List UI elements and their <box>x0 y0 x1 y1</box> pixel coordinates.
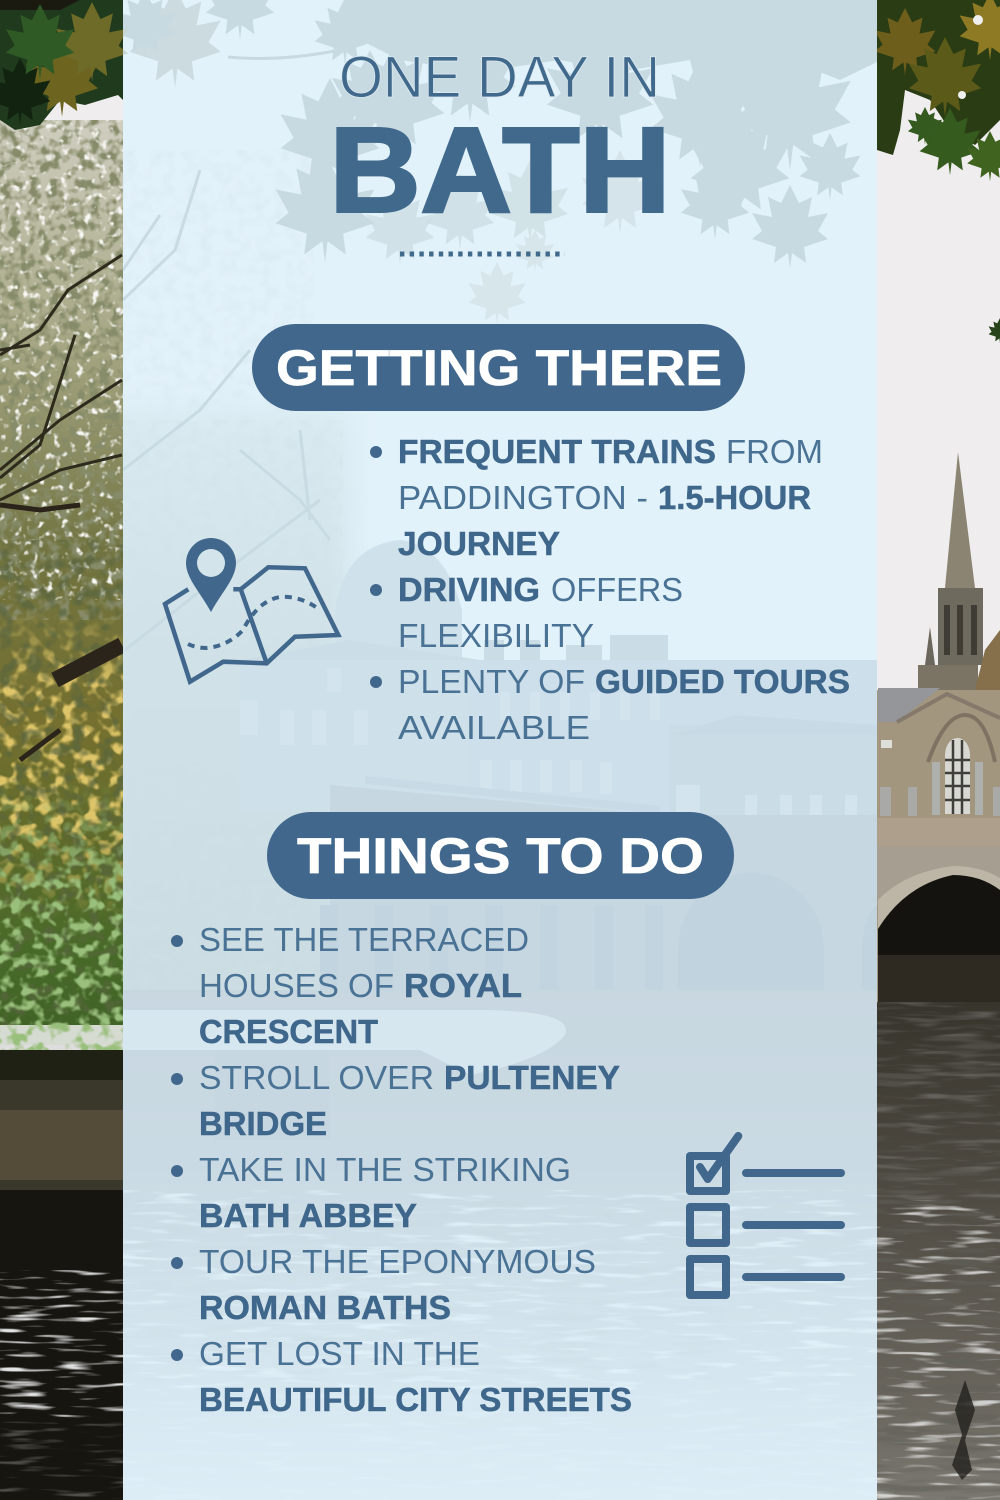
item: trains: 1.5-HOUR <box>658 479 811 516</box>
item: driving: OFFERS <box>551 571 683 608</box>
item: city streets: BEAUTIFUL CITY STREETS <box>199 1381 632 1418</box>
bullet list: getting there <box>370 433 850 746</box>
section: things to do <box>171 812 841 1418</box>
item: driving: DRIVING <box>398 571 540 608</box>
overhanging leaves behind the panel <box>115 0 877 325</box>
item: trains: FROM <box>726 433 823 470</box>
item: royal crescent: SEE THE TERRACED <box>199 921 529 958</box>
item: royal crescent: HOUSES OF <box>199 967 394 1004</box>
item: pulteney bridge <box>171 1059 620 1142</box>
left trees <box>0 120 123 1050</box>
item: trains: JOURNEY <box>398 525 560 562</box>
icon: checklist <box>690 1136 841 1295</box>
item: city streets: GET LOST IN THE <box>199 1335 480 1372</box>
title line one: ONE DAY IN <box>339 45 660 110</box>
overhanging leaves upper right <box>875 0 1000 343</box>
item: royal crescent: CRESCENT <box>199 1013 378 1050</box>
translucent central panel <box>123 0 877 1500</box>
heading pill: things to do: THINGS TO DO <box>297 828 704 884</box>
item: pulteney bridge: BRIDGE <box>199 1105 327 1142</box>
church spire and tower <box>918 452 1000 700</box>
terrace of buildings behind the panel <box>365 635 877 830</box>
bridge with arches behind the panel <box>320 785 877 1000</box>
title line two: BATH <box>330 102 670 238</box>
heading pill: getting there <box>252 324 745 411</box>
item: guided tours: PLENTY OF <box>398 663 585 700</box>
item: royal crescent: ROYAL <box>404 967 522 1004</box>
sky <box>0 0 1000 1010</box>
item: driving <box>370 571 683 654</box>
item: guided tours: AVAILABLE <box>398 709 590 746</box>
heading pill: getting there: GETTING THERE <box>276 340 722 396</box>
item: guided tours <box>370 663 850 746</box>
item: pulteney bridge: STROLL OVER <box>199 1059 434 1096</box>
item: trains: PADDINGTON - <box>398 479 648 516</box>
item: roman baths <box>171 1243 596 1326</box>
faint tree and foliage behind the panel <box>123 170 348 990</box>
item: driving: FLEXIBILITY <box>398 617 594 654</box>
bullet list: things to do <box>171 921 632 1418</box>
weir and stone wall <box>0 1010 566 1190</box>
river <box>0 990 1000 1500</box>
item: guided tours: GUIDED TOURS <box>595 663 850 700</box>
item: trains <box>370 433 823 562</box>
Pulteney Bridge building right side <box>877 688 1000 1002</box>
item: pulteney bridge: PULTENEY <box>444 1059 620 1096</box>
item: city streets <box>171 1335 632 1418</box>
item: bath abbey <box>171 1151 571 1234</box>
item: bath abbey: TAKE IN THE STRIKING <box>199 1151 571 1188</box>
item: bath abbey: BATH ABBEY <box>199 1197 417 1234</box>
item: trains: FREQUENT TRAINS <box>398 433 716 470</box>
heading pill: things to do <box>267 812 734 899</box>
title <box>330 45 670 238</box>
item: roman baths: TOUR THE EPONYMOUS <box>199 1243 596 1280</box>
dome and left block of buildings behind the panel <box>240 540 480 810</box>
overhanging leaves upper left <box>0 0 128 130</box>
item: royal crescent <box>171 921 529 1050</box>
item: roman baths: ROMAN BATHS <box>199 1289 451 1326</box>
dotted divider <box>400 252 565 256</box>
section: getting there <box>165 324 850 746</box>
icon: map with location pin <box>165 538 338 682</box>
